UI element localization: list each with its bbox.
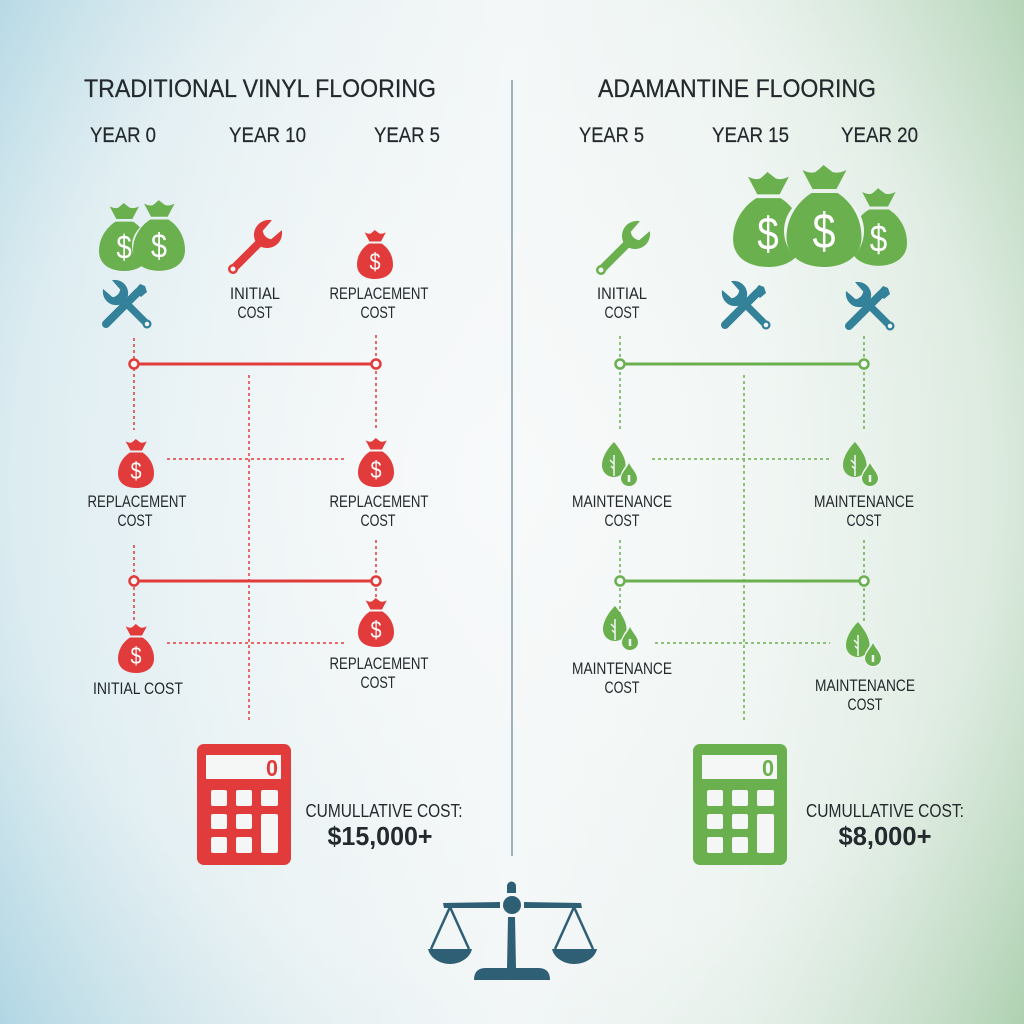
label: maintenance cost: COST: [604, 511, 640, 530]
icon: leaf and drop: [846, 622, 882, 667]
icon: red money bag: [118, 624, 154, 673]
label: initial cost: COST: [604, 303, 640, 322]
title: adamantine flooring: ADAMANTINE FLOORING: [598, 75, 876, 103]
label: maintenance cost: MAINTENANCE: [814, 492, 914, 511]
icon: three green money bags: [733, 165, 907, 269]
year labels: YEAR 5: [374, 124, 440, 147]
label: initial cost: INITIAL COST: [93, 679, 183, 698]
label: replacement cost: [330, 284, 428, 322]
icon: crossed tools: [99, 276, 159, 336]
cumulative cost: 8,000: $8,000+: [838, 821, 932, 851]
icon: red calculator: [197, 744, 291, 865]
icon: green calculator: [693, 744, 787, 865]
label: replacement cost: [330, 492, 428, 530]
cumulative cost: 15,000: [306, 801, 462, 851]
year labels: YEAR 10: [229, 124, 306, 147]
label: maintenance cost: COST: [604, 678, 640, 697]
year labels: YEAR 0: [90, 124, 156, 147]
label: replacement cost: REPLACEMENT: [88, 492, 186, 511]
label: maintenance cost: MAINTENANCE: [572, 492, 672, 511]
label: replacement cost: REPLACEMENT: [330, 654, 428, 673]
label: replacement cost: REPLACEMENT: [330, 492, 428, 511]
year labels: YEAR 20: [841, 124, 918, 147]
icon: leaf and drop: [843, 442, 879, 487]
label: maintenance cost: MAINTENANCE: [572, 659, 672, 678]
label: initial cost: [230, 284, 280, 322]
label: replacement cost: COST: [360, 511, 396, 530]
icon: red money bag: [358, 438, 394, 487]
label: maintenance cost: [815, 676, 915, 714]
panel: adamantine flooring: [572, 75, 964, 865]
label: initial cost: INITIAL: [597, 284, 647, 303]
label: replacement cost: COST: [118, 511, 152, 530]
label: maintenance cost: [814, 492, 914, 530]
center divider: [511, 80, 513, 856]
icon: red money bag: [358, 598, 394, 647]
icon: red calculator: 0: [266, 755, 278, 781]
icon: crossed tools: [718, 277, 778, 337]
year labels: YEAR 15: [712, 124, 789, 147]
icon: green calculator: 0: [762, 755, 774, 781]
label: maintenance cost: COST: [846, 511, 882, 530]
label: maintenance cost: COST: [848, 695, 882, 714]
label: initial cost: COST: [238, 303, 272, 322]
label: replacement cost: [88, 492, 186, 530]
cumulative cost: 8,000: CUMULLATIVE COST:: [806, 801, 964, 821]
label: maintenance cost: [572, 659, 672, 697]
title: traditional vinyl flooring: TRADITIONAL VINYL FLOORING: [84, 75, 436, 103]
label: replacement cost: COST: [360, 303, 396, 322]
icon: crossed tools: [842, 278, 902, 338]
year labels: [579, 124, 918, 147]
panel: traditional vinyl flooring: [84, 75, 462, 865]
label: replacement cost: REPLACEMENT: [330, 284, 428, 303]
icon: balance scale: [428, 882, 597, 980]
icon: red money bag: [118, 439, 154, 488]
label: replacement cost: [330, 654, 428, 692]
icon: two green money bags: [99, 200, 186, 272]
icon: leaf and drop: [602, 442, 638, 487]
label: initial cost: [597, 284, 647, 322]
icon: red money bag: [357, 230, 393, 279]
cumulative cost: 8,000: [806, 801, 964, 851]
icon: green wrench: [588, 216, 655, 283]
timeline chart: red: [130, 335, 380, 722]
year labels: YEAR 5: [579, 124, 644, 147]
label: initial cost: INITIAL: [230, 284, 280, 303]
icon: red wrench: [220, 215, 287, 282]
label: maintenance cost: [572, 492, 672, 530]
year labels: [90, 124, 440, 147]
label: maintenance cost: MAINTENANCE: [815, 676, 915, 695]
timeline chart: green: [616, 336, 868, 722]
label: replacement cost: COST: [360, 673, 396, 692]
icon: leaf and drop: [603, 606, 639, 651]
cumulative cost: 15,000: CUMULLATIVE COST:: [306, 801, 462, 821]
cumulative cost: 15,000: $15,000+: [328, 821, 432, 851]
